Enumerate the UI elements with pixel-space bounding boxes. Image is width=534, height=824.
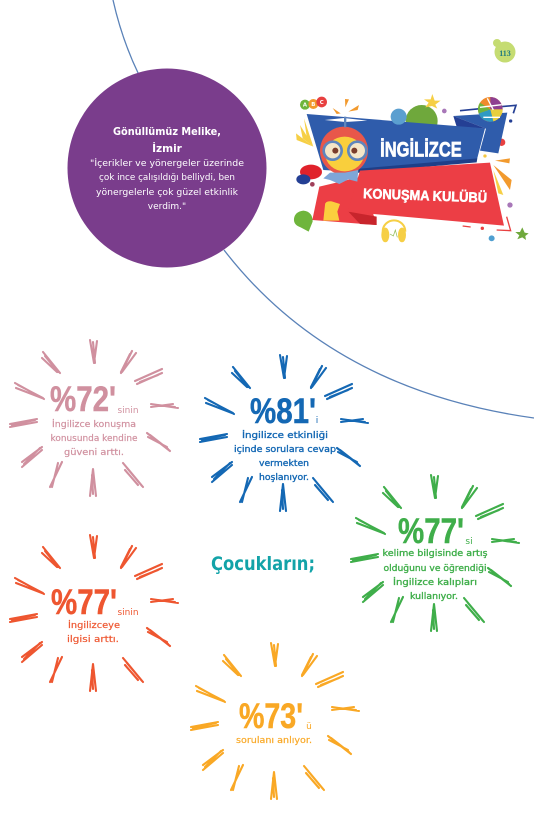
percentage: %81' <box>250 392 316 431</box>
suffix: sinin <box>118 406 138 416</box>
ABC speech bubbles: A <box>303 103 308 109</box>
suffix: si <box>465 537 473 547</box>
description: olduğunu ve öğrendiği <box>384 564 486 574</box>
logo subtitle: KONUŞMA KULÜBÜ <box>363 185 487 205</box>
red banner <box>348 163 504 226</box>
child silhouette icon <box>323 201 340 221</box>
quote text: çok ince çalışıldığı belliydi, ben <box>99 173 235 183</box>
burst: 77 percent, green <box>351 475 519 631</box>
blue banner <box>307 114 485 172</box>
description: kelime bilgisinde artış <box>382 549 488 559</box>
ABC speech bubbles <box>300 97 327 110</box>
description: içinde sorulara cevap <box>234 445 336 455</box>
description: İngilizce etkinliği <box>242 430 328 441</box>
description: İngilizceye <box>68 620 120 631</box>
ABC speech bubbles: B <box>311 102 315 108</box>
description: sorulanı anlıyor. <box>236 736 312 746</box>
heading: Çocukların: Çocukların; <box>211 553 315 575</box>
burst: 73 percent, orange <box>191 643 359 799</box>
rays <box>200 355 368 511</box>
volunteer name: Gönüllümüz Melike, <box>113 126 221 138</box>
colourful globe <box>478 97 503 122</box>
decorative arc: lower segment <box>224 250 534 418</box>
green speech bubble <box>294 211 313 232</box>
quote text: yönergelerle çok güzel etkinlik <box>96 188 239 198</box>
mascot <box>320 117 368 184</box>
decorative arc: upper segment <box>113 0 139 75</box>
page number badge <box>493 39 516 62</box>
percentage: %73' <box>239 697 303 736</box>
percentage: %77' <box>51 583 117 622</box>
quote text: "İçerikler ve yönergeler üzerinde <box>90 158 244 169</box>
description: konusunda kendine <box>50 434 138 444</box>
description: hoşlanıyor. <box>259 473 309 483</box>
ABC speech bubbles: C <box>320 100 324 106</box>
suffix: ü <box>306 722 312 732</box>
headphones icon <box>382 220 405 241</box>
percentage: %72' <box>50 380 116 419</box>
rays <box>10 340 178 496</box>
page number badge: 113 <box>499 49 511 58</box>
logo: İngilizce Konuşma Kulübü banner <box>294 94 529 241</box>
description: İngilizce kalıpları <box>393 577 477 588</box>
rays <box>351 475 519 631</box>
description: İngilizce konuşma <box>52 419 136 430</box>
percentage: %77' <box>398 512 464 551</box>
blue circle <box>391 109 407 125</box>
volunteer name: İzmir <box>152 141 183 155</box>
red banner lower left <box>312 177 377 225</box>
blue banner tail <box>453 113 507 153</box>
description: vermekten <box>259 459 309 469</box>
description: ilgisi arttı. <box>67 635 119 645</box>
panel: volunteer quote circle <box>68 68 266 268</box>
logo title: İNGİLİZCE <box>380 137 462 161</box>
burst: 72 percent, pink <box>10 340 178 496</box>
rays <box>10 535 178 691</box>
description: kullanıyor. <box>410 592 458 602</box>
suffix: sinin <box>118 608 138 618</box>
rays <box>191 643 359 799</box>
quote text: verdim." <box>148 202 186 212</box>
burst: 81 percent, blue <box>200 355 368 511</box>
logo decorations <box>296 94 529 241</box>
description: güveni arttı. <box>64 448 124 458</box>
speech bubbles left <box>296 165 322 187</box>
suffix: i <box>316 416 318 426</box>
burst: 77 percent, red <box>10 535 178 691</box>
